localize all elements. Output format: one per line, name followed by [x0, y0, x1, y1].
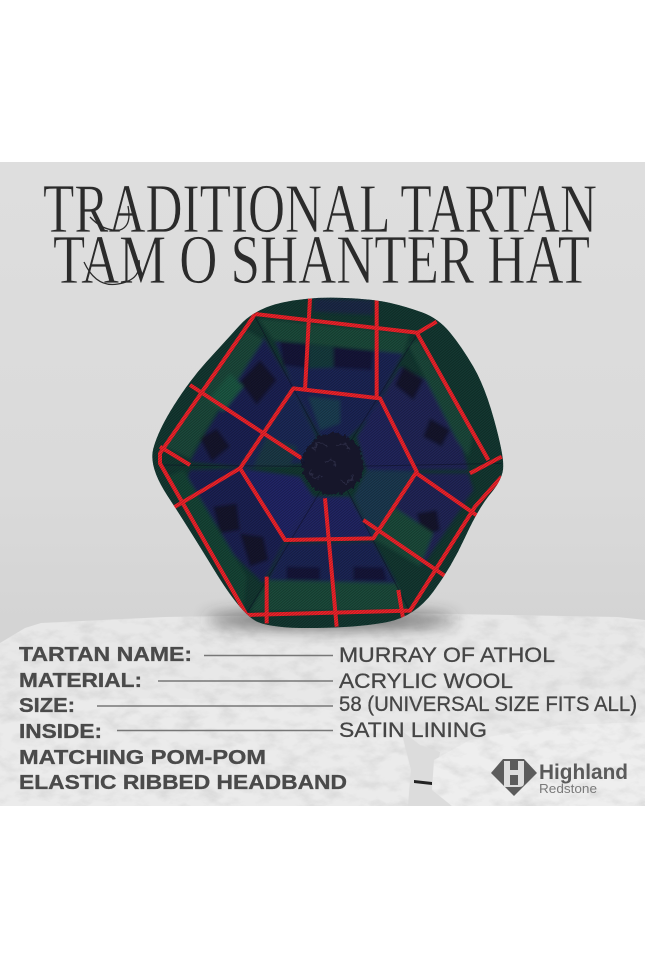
hat base fabric — [140, 290, 510, 633]
spec labels: INSIDE: — [19, 721, 102, 743]
logo: Highland Redstone — [491, 759, 628, 796]
tartan hat — [140, 290, 510, 633]
hat shadow — [205, 611, 455, 629]
logo: Highland Redstone: Highland — [539, 761, 628, 784]
spec labels: ELASTIC RIBBED HEADBAND — [19, 772, 347, 794]
spec values — [339, 644, 637, 742]
spec values: MURRAY OF ATHOL — [339, 644, 555, 667]
infographic canvas — [0, 162, 645, 806]
spec labels: MATCHING POM-POM — [19, 747, 266, 769]
spec labels — [19, 644, 347, 794]
spec values: 58 (UNIVERSAL SIZE FITS ALL) — [339, 693, 637, 716]
spec labels: SIZE: — [19, 695, 75, 717]
red overcheck lines — [160, 298, 502, 627]
pom-pom — [302, 433, 363, 495]
spec values: SATIN LINING — [339, 719, 487, 742]
spec labels: TARTAN NAME: — [19, 644, 192, 666]
title — [43, 171, 597, 299]
connector lines — [97, 656, 333, 730]
tartan colour blocks — [163, 298, 473, 612]
panel seams — [160, 317, 502, 613]
twill weave texture — [140, 290, 510, 633]
icon: diamond mark — [491, 759, 537, 796]
grey backdrop panel — [0, 162, 645, 806]
logo: Highland Redstone: Redstone — [539, 781, 597, 796]
spec labels: MATERIAL: — [19, 670, 142, 692]
stone plinth — [0, 613, 645, 806]
spec values: ACRYLIC WOOL — [339, 670, 513, 693]
